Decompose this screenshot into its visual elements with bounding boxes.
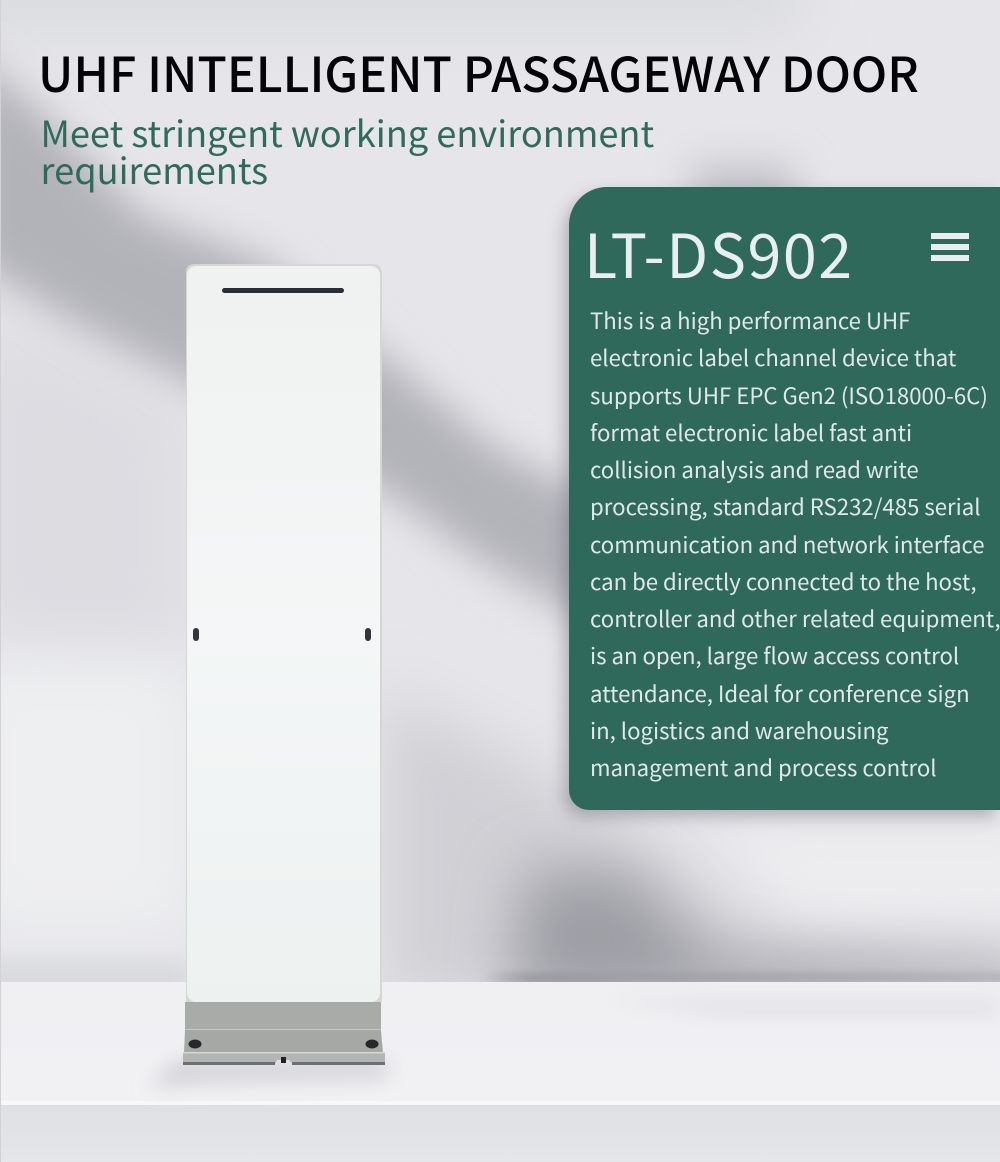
description text: collision analysis and read write	[590, 453, 919, 485]
subtitle: requirements	[40, 143, 268, 195]
description text: attendance, Ideal for conference sign	[590, 676, 970, 708]
description text: in, logistics and warehousing	[590, 714, 889, 746]
wall tones	[0, 0, 800, 30]
icon: menu	[931, 233, 969, 261]
panel: product description	[569, 187, 1000, 810]
description text: format electronic label fast anti	[590, 416, 912, 448]
description text	[590, 304, 1000, 783]
description text: processing, standard RS232/485 serial	[590, 490, 980, 522]
description text: supports UHF EPC Gen2 (ISO18000-6C)	[590, 378, 988, 410]
icon: left side hole	[193, 628, 199, 641]
shelf	[0, 982, 1000, 1105]
description text: management and process control	[590, 751, 937, 783]
model name heading: LT-DS902	[584, 207, 854, 296]
subtitle: Meet stringent working environment	[40, 106, 654, 158]
door base bracket	[183, 1002, 385, 1065]
icon: floor shadow of door base	[150, 1062, 392, 1088]
icon: reader slot	[222, 288, 344, 293]
description text: communication and network interface	[590, 528, 985, 560]
description text: electronic label channel device that	[590, 341, 956, 373]
description text: can be directly connected to the host,	[590, 565, 977, 597]
diagonal light band shadow	[0, 50, 600, 630]
title: UHF INTELLIGENT PASSAGEWAY DOOR	[38, 36, 919, 106]
description text: This is a high performance UHF	[590, 304, 910, 336]
lower wall shadow	[383, 690, 1000, 1000]
door panel	[186, 264, 382, 1002]
subtitle	[40, 106, 654, 195]
description text: is an open, large flow access control	[590, 639, 959, 671]
top right patch	[690, 165, 810, 230]
description text: controller and other related equipment,	[590, 602, 1000, 634]
icon: right side hole	[365, 628, 371, 641]
